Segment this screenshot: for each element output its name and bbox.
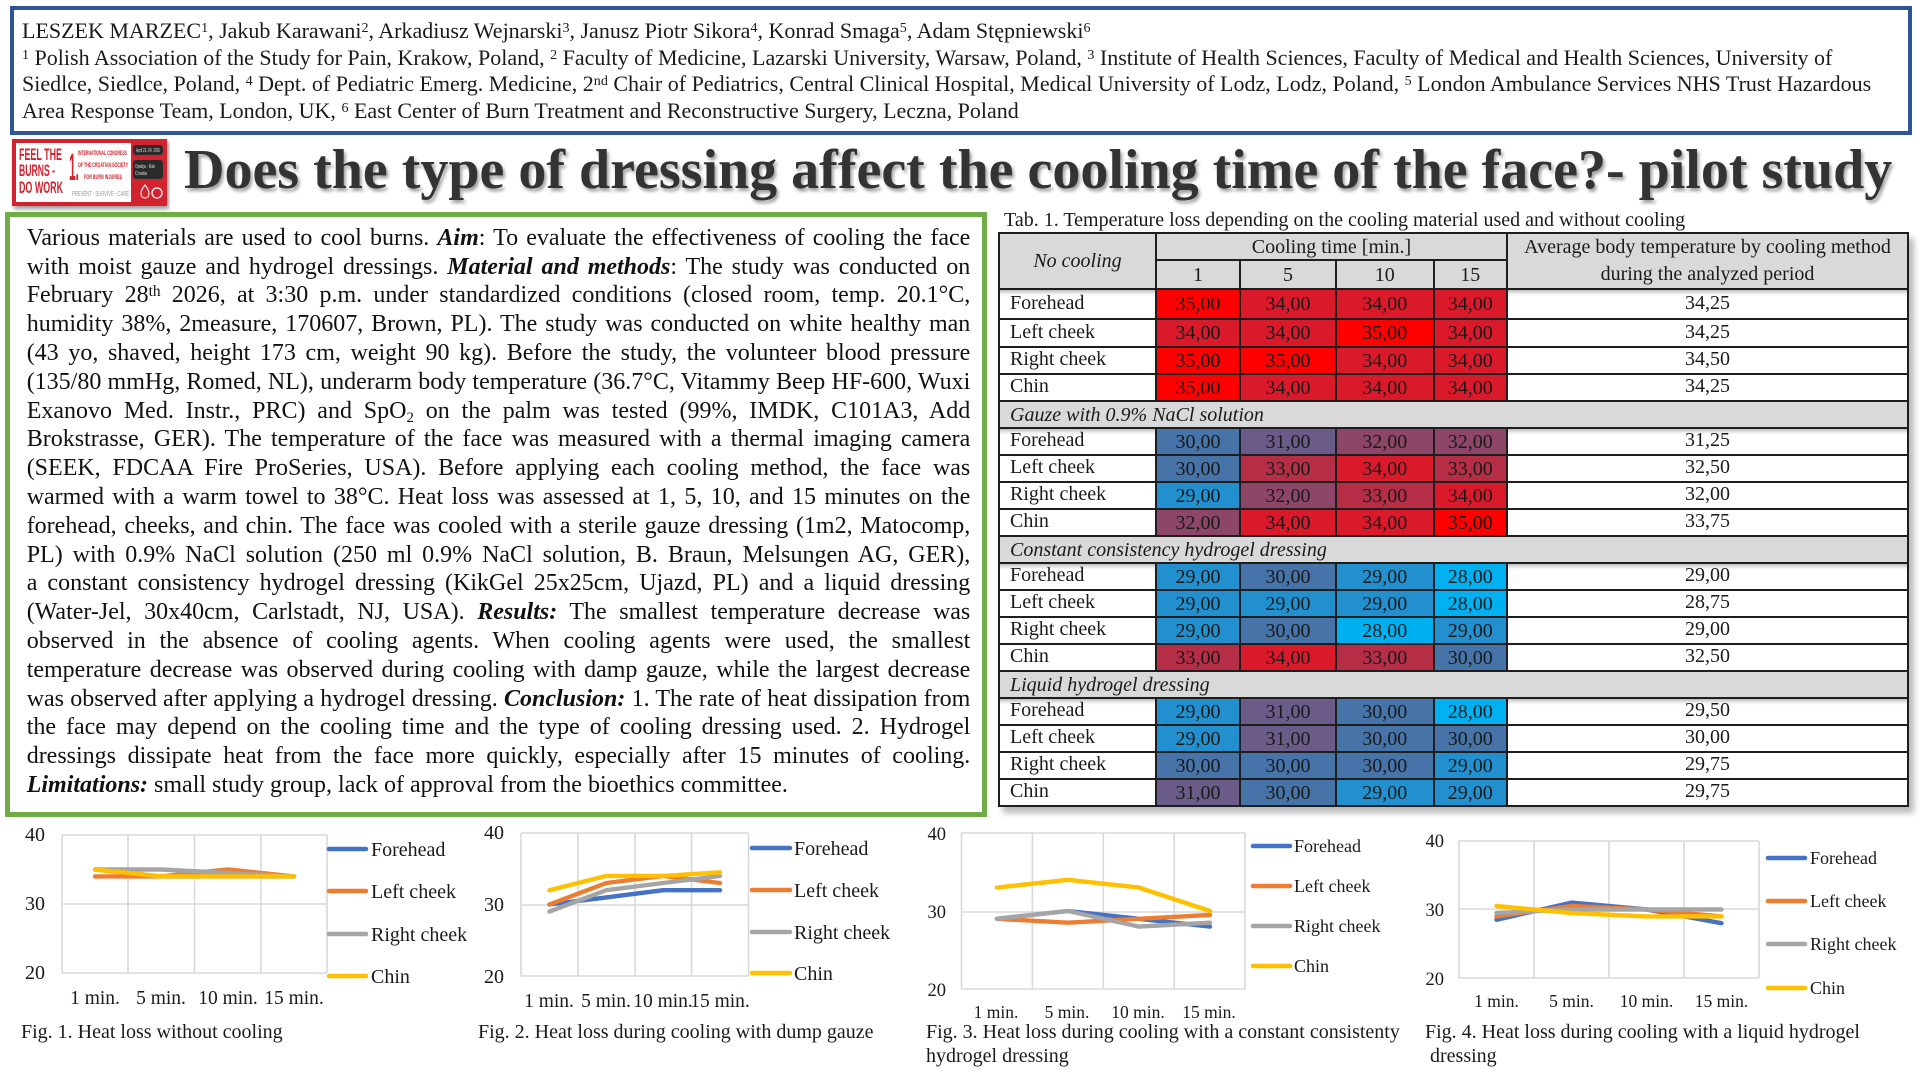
table header: 33,00 xyxy=(1448,458,1493,480)
table header: 33,00 xyxy=(1362,646,1407,668)
chart: Fig. 4 liquid hydrogel: 30 xyxy=(1426,901,1444,921)
chart: Fig. 3 constant consistency hydrogel: 1 min. xyxy=(974,1002,1018,1022)
chart: Fig. 3 constant consistency hydrogel: Forehead xyxy=(1294,836,1361,856)
panel: authors and affiliations: Area Response Team, London, UK, 6 East Center of Burn Treatment and Reconstructive Surgery, Leczna, Poland xyxy=(22,98,1019,122)
table header: 33,00 xyxy=(1176,646,1220,668)
table header: 29,00 xyxy=(1176,484,1220,506)
chart: Fig. 4 liquid hydrogel: 10 min. xyxy=(1620,991,1673,1011)
chart: Fig. 1 no cooling: 10 min. xyxy=(198,988,258,1009)
table header: Chin xyxy=(1010,645,1049,667)
table header: 34,00 xyxy=(1362,293,1407,315)
chart: Fig. 2 gauze: Chin xyxy=(794,963,833,985)
table header: 30,00 xyxy=(1448,728,1493,750)
table header: 30,00 xyxy=(1266,566,1310,588)
text block: abstract: dressings dissipate heat from the face more quickly, especially after 15 minutes of cooling. xyxy=(27,743,970,769)
table header: Chin xyxy=(1010,510,1049,532)
table header: 35,00 xyxy=(1362,322,1407,344)
chart: Fig. 1 no cooling: Right cheek xyxy=(371,924,467,946)
chart: Fig. 3 constant consistency hydrogel: Chin xyxy=(1294,956,1329,976)
logo: Feel the Burns congress banner: FEEL THE xyxy=(19,145,62,164)
table header: 29,00 xyxy=(1448,782,1493,804)
table header: 29,75 xyxy=(1685,780,1730,802)
text block: abstract: forehead, cheeks, and chin. The face was cooled with a sterile gauze dressing (1m2, Matocomp, xyxy=(27,513,970,539)
text block: abstract: was observed after applying a hydrogel dressing. Conclusion: 1. The rate of heat dissipation from xyxy=(27,686,970,712)
table header: 28,00 xyxy=(1362,620,1407,642)
table header: 29,00 xyxy=(1176,592,1220,614)
table caption: Tab. 1. Temperature loss depending on the cooling material used and without cooling xyxy=(1004,208,1685,230)
text block: abstract: Brokstrasse, GER). The temperature of the face was measured with a thermal imaging camera xyxy=(27,426,970,452)
table header: 29,00 xyxy=(1448,620,1493,642)
table header: 29,00 xyxy=(1176,566,1220,588)
chart: Fig. 4 liquid hydrogel: Right cheek xyxy=(1810,934,1896,954)
text block: abstract: (135/80 mmHg, Romed, NL), underarm body temperature (36.7°C, Vitammy Beep HF-600, Wuxi xyxy=(27,369,970,395)
table header: Cooling time [min.] xyxy=(1252,236,1411,258)
chart: Fig. 4 liquid hydrogel: 15 min. xyxy=(1695,991,1748,1011)
caption: Fig. 3: hydrogel dressing xyxy=(926,1045,1069,1067)
table header: 32,50 xyxy=(1685,456,1730,478)
logo: Feel the Burns congress banner: PREVENT - SURVIVE - CARE xyxy=(72,191,129,198)
table header: 32,50 xyxy=(1685,645,1730,667)
table header: 31,00 xyxy=(1266,700,1310,722)
chart: Fig. 3 constant consistency hydrogel: 20 xyxy=(928,981,946,1001)
chart: Fig. 2 gauze xyxy=(484,822,890,1012)
table header: 10 xyxy=(1375,264,1395,286)
table header: 28,00 xyxy=(1448,700,1493,722)
text block: abstract: humidity 38%, 2measure, 170607, Brown, PL). The study was conducted on white healthy man xyxy=(27,311,970,337)
table header xyxy=(1000,234,1907,805)
chart: Fig. 3 constant consistency hydrogel: Left cheek xyxy=(1294,876,1370,896)
table header: 30,00 xyxy=(1362,700,1407,722)
text block: abstract: Limitations: small study group, lack of approval from the bioethics committee. xyxy=(27,772,788,798)
table header: 34,25 xyxy=(1685,292,1730,314)
table header: 34,50 xyxy=(1685,348,1730,370)
table header: 29,75 xyxy=(1685,753,1730,775)
section header: gauze: Gauze with 0.9% NaCl solution xyxy=(1010,404,1264,426)
table header: 31,00 xyxy=(1266,728,1310,750)
table header: 30,00 xyxy=(1448,646,1493,668)
table header: Right cheek xyxy=(1010,483,1106,505)
logo: Feel the Burns congress banner: Croatia xyxy=(135,171,147,177)
table header: 30,00 xyxy=(1362,728,1407,750)
table header: 34,25 xyxy=(1685,375,1730,397)
table header: 34,00 xyxy=(1362,458,1407,480)
caption: Fig. 1: Fig. 1. Heat loss without cooling xyxy=(21,1021,283,1043)
table header: during the analyzed period xyxy=(1601,263,1814,285)
chart: Fig. 4 liquid hydrogel: 40 xyxy=(1426,832,1444,852)
chart: Fig. 1 no cooling xyxy=(25,824,467,1009)
table header: 31,25 xyxy=(1685,429,1730,451)
panel: authors and affiliations: 1 Polish Association of the Study for Pain, Krakow, Poland, 2 Faculty of Medicine, Lazarski University, Warsaw, Poland, 3 Institute of Health Sciences, Faculty of Medical and Health Sciences, University of xyxy=(22,44,1832,70)
chart: Fig. 2 gauze: 5 min. xyxy=(581,991,631,1012)
logo: Feel the Burns congress banner: FOR BURN INJURIES xyxy=(84,174,122,181)
table header: 29,00 xyxy=(1685,618,1730,640)
table header: Left cheek xyxy=(1010,591,1095,613)
caption: Fig. 4 xyxy=(1425,1021,1860,1067)
text block: abstract: February 28th 2026, at 3:30 p.m. under standardized conditions (closed room, temp. 20.1°C, xyxy=(27,282,970,308)
table header: 29,00 xyxy=(1176,700,1220,722)
chart: Fig. 4 liquid hydrogel: 20 xyxy=(1426,970,1444,990)
table header: 30,00 xyxy=(1362,754,1407,776)
table header: 1 xyxy=(1193,264,1203,286)
table header: Right cheek xyxy=(1010,348,1106,370)
text block: abstract: the face may depend on the cooling time and the type of cooling dressing used. 2. Hydrogel xyxy=(27,714,970,740)
logo: Feel the Burns congress banner: DO WORK xyxy=(19,178,63,197)
text block: abstract: warmed with a warm towel to 38°C. Heat loss was assessed at 1, 5, 10, and 15 minutes on the xyxy=(27,484,970,510)
chart: Fig. 1 no cooling: Left cheek xyxy=(371,881,456,903)
table header: 34,00 xyxy=(1266,322,1310,344)
chart: Fig. 2 gauze: 20 xyxy=(484,966,504,988)
logo: Feel the Burns congress banner: Opatija - Rab xyxy=(135,164,155,170)
table header: 29,00 xyxy=(1362,592,1407,614)
table header: 30,00 xyxy=(1685,726,1730,748)
chart: Fig. 1 no cooling: Chin xyxy=(371,966,410,988)
chart: Fig. 3 constant consistency hydrogel: 30 xyxy=(928,903,946,923)
caption: Fig. 2: Fig. 2. Heat loss during cooling with dump gauze xyxy=(478,1021,874,1043)
chart: Fig. 2 gauze: 15 min. xyxy=(690,991,750,1012)
table header: 33,00 xyxy=(1362,484,1407,506)
panel: abstract box border xyxy=(4,212,987,817)
table header: 30,00 xyxy=(1266,782,1310,804)
logo: Feel the Burns congress banner xyxy=(11,139,170,212)
table header: 31,00 xyxy=(1176,782,1220,804)
table header: 35,00 xyxy=(1176,376,1220,398)
table header: 35,00 xyxy=(1176,350,1220,372)
table header: 34,00 xyxy=(1266,646,1310,668)
table header: 34,00 xyxy=(1362,376,1407,398)
table header: Left cheek xyxy=(1010,456,1095,478)
chart: Fig. 1 no cooling: 40 xyxy=(25,824,45,846)
table header: 32,00 xyxy=(1685,483,1730,505)
chart: Fig. 3 constant consistency hydrogel: Right cheek xyxy=(1294,916,1380,936)
chart: Fig. 3 constant consistency hydrogel xyxy=(928,825,1380,1022)
text block: abstract: with moist gauze and hydrogel dressings. Material and methods: The study was conducted on xyxy=(27,254,970,280)
table header: Forehead xyxy=(1010,429,1084,451)
text block: abstract: Various materials are used to cool burns. Aim: To evaluate the effectiveness of cooling the face xyxy=(27,225,970,251)
panel: authors and affiliations xyxy=(10,6,1912,135)
table header: 34,00 xyxy=(1266,376,1310,398)
table header: 35,00 xyxy=(1176,293,1220,315)
text block: abstract: Exanovo Med. Instr., PRC) and SpO2 on the palm was tested (99%, IMDK, C101A3, Add xyxy=(27,398,970,426)
table header: Forehead xyxy=(1010,564,1084,586)
chart: Fig. 3 constant consistency hydrogel: 40 xyxy=(928,825,946,845)
table header: 31,00 xyxy=(1266,430,1310,452)
table header: 29,50 xyxy=(1685,699,1730,721)
table header: 29,00 xyxy=(1448,754,1493,776)
text block: abstract: (Water-Jel, 30x40cm, Carlstadt, NJ, USA). Results: The smallest temperature decrease was xyxy=(27,599,970,625)
text block: abstract xyxy=(26,225,970,798)
table header: 34,00 xyxy=(1176,322,1220,344)
chart: Fig. 4 liquid hydrogel: 5 min. xyxy=(1549,991,1594,1011)
panel: authors and affiliations: LESZEK MARZEC1, Jakub Karawani2, Arkadiusz Wejnarski3, Janusz Piotr Sikora4, Konrad Smaga5, Adam Stępniewski6 xyxy=(22,18,1090,43)
table header: 29,00 xyxy=(1362,782,1407,804)
chart: Fig. 3 constant consistency hydrogel: 5 min. xyxy=(1045,1002,1089,1022)
logo: Feel the Burns congress banner: OF THE CROATIAN SOCIETY xyxy=(78,162,128,169)
table header: 29,00 xyxy=(1176,620,1220,642)
table header: 29,00 xyxy=(1176,728,1220,750)
chart: Fig. 4 liquid hydrogel: Forehead xyxy=(1810,848,1877,868)
table header: Right cheek xyxy=(1010,753,1106,775)
table header: 15 xyxy=(1460,264,1480,286)
table header: 34,00 xyxy=(1448,350,1493,372)
table header: 35,00 xyxy=(1448,512,1493,534)
table header: 33,00 xyxy=(1266,458,1310,480)
text block: abstract: temperature decrease was observed during cooling with damp gauze, while the largest decrease xyxy=(27,657,970,683)
caption: Fig. 4: dressing xyxy=(1430,1045,1497,1067)
panel: authors and affiliations: Siedlce, Siedlce, Poland, 4 Dept. of Pediatric Emerg. Medicine, 2nd Chair of Pediatrics, Central Clinical Hospital, Medical University of Lodz, Lodz, Poland, 5 London Ambulance Services NHS Trust Hazardous xyxy=(22,71,1871,96)
logo: Feel the Burns congress banner: 1. xyxy=(69,147,79,189)
chart: Fig. 4 liquid hydrogel xyxy=(1426,832,1896,1011)
table header: 30,00 xyxy=(1266,620,1310,642)
chart: Fig. 4 liquid hydrogel: Left cheek xyxy=(1810,891,1886,911)
table header: No cooling xyxy=(1033,250,1122,272)
table header: 34,00 xyxy=(1448,293,1493,315)
table header: 5 xyxy=(1283,264,1293,286)
table header: Chin xyxy=(1010,375,1049,397)
chart: Fig. 2 gauze: 1 min. xyxy=(524,991,574,1012)
chart: Fig. 1 no cooling: 5 min. xyxy=(136,988,186,1009)
table header: 32,00 xyxy=(1362,430,1407,452)
text block: abstract: (43 yo, shaved, height 173 cm, weight 90 kg). Before the study, the volunteer blood pressure xyxy=(27,340,970,366)
table header: 34,25 xyxy=(1685,320,1730,342)
table header: Left cheek xyxy=(1010,320,1095,342)
table header: 28,00 xyxy=(1448,592,1493,614)
title: Does the type of dressing affect the cooling time of the face?- pilot study xyxy=(184,139,1892,201)
table header: 30,00 xyxy=(1176,754,1220,776)
chart: Fig. 2 gauze: Forehead xyxy=(794,838,868,860)
table header: 34,00 xyxy=(1448,484,1493,506)
table header: 28,75 xyxy=(1685,591,1730,613)
table header: 32,00 xyxy=(1266,484,1310,506)
table header: 34,00 xyxy=(1266,512,1310,534)
text block: abstract: observed in the absence of cooling agents. When cooling agents were used, the smallest xyxy=(27,628,970,654)
chart: Fig. 4 liquid hydrogel: Chin xyxy=(1810,978,1845,998)
table header: Forehead xyxy=(1010,292,1084,314)
table header: 30,00 xyxy=(1176,430,1220,452)
chart: Fig. 1 no cooling: 20 xyxy=(25,962,45,984)
table header: 29,00 xyxy=(1362,566,1407,588)
table header: 35,00 xyxy=(1266,350,1310,372)
text block: abstract: PL) with 0.9% NaCl solution (250 ml 0.9% NaCl solution, B. Braun, Melsungen AG, GER), xyxy=(27,542,970,568)
table header: 32,00 xyxy=(1176,512,1220,534)
chart: Fig. 3 constant consistency hydrogel: 15 min. xyxy=(1182,1002,1236,1022)
chart: Fig. 4 liquid hydrogel: 1 min. xyxy=(1474,991,1519,1011)
table header: 34,00 xyxy=(1362,512,1407,534)
table header: 30,00 xyxy=(1266,754,1310,776)
caption: Fig. 3 xyxy=(926,1021,1400,1067)
table header: 34,00 xyxy=(1362,350,1407,372)
text block: abstract: a constant consistency hydrogel dressing (KikGel 25x25cm, Ujazd, PL) and a liquid dressing xyxy=(27,570,970,596)
table: temperature loss heat map xyxy=(998,232,1909,807)
logo: Feel the Burns congress banner: BURNS - xyxy=(19,161,55,180)
table header: 29,00 xyxy=(1266,592,1310,614)
caption: Fig. 4: Fig. 4. Heat loss during cooling with a liquid hydrogel xyxy=(1425,1021,1860,1043)
section header: constant consistency hydrogel: Constant consistency hydrogel dressing xyxy=(1010,538,1327,560)
table header: Left cheek xyxy=(1010,726,1095,748)
chart: Fig. 1 no cooling: Forehead xyxy=(371,839,445,861)
chart: Fig. 1 no cooling: 15 min. xyxy=(264,988,324,1009)
text block: abstract: (SEEK, FDCAA Fire ProSeries, USA). Before applying each cooling method, the face was xyxy=(27,455,970,481)
chart: Fig. 1 no cooling: 1 min. xyxy=(70,988,120,1009)
chart: Fig. 2 gauze: 10 min. xyxy=(633,991,693,1012)
chart: Fig. 2 gauze: Right cheek xyxy=(794,922,890,944)
logo: Feel the Burns congress banner: INTERNATIONAL CONGRESS xyxy=(78,150,127,157)
table header: Chin xyxy=(1010,780,1049,802)
table header: Average body temperature by cooling method xyxy=(1524,236,1891,258)
chart: Fig. 3 constant consistency hydrogel: 10 min. xyxy=(1111,1002,1165,1022)
table header: 28,00 xyxy=(1448,566,1493,588)
chart: Fig. 1 no cooling: 30 xyxy=(25,893,45,915)
table header: 34,00 xyxy=(1448,376,1493,398)
table header: 34,00 xyxy=(1266,293,1310,315)
table header: Forehead xyxy=(1010,699,1084,721)
table header: Right cheek xyxy=(1010,618,1106,640)
chart: Fig. 2 gauze: 40 xyxy=(484,822,504,844)
table header: 34,00 xyxy=(1448,322,1493,344)
table header: 33,75 xyxy=(1685,510,1730,532)
caption: Fig. 3: Fig. 3. Heat loss during cooling with a constant consistenty xyxy=(926,1021,1400,1043)
chart: Fig. 2 gauze: 30 xyxy=(484,894,504,916)
chart: Fig. 2 gauze: Left cheek xyxy=(794,880,879,902)
table header: 30,00 xyxy=(1176,458,1220,480)
section header: liquid hydrogel: Liquid hydrogel dressing xyxy=(1010,674,1210,696)
table header: 29,00 xyxy=(1685,564,1730,586)
table header: 32,00 xyxy=(1448,430,1493,452)
